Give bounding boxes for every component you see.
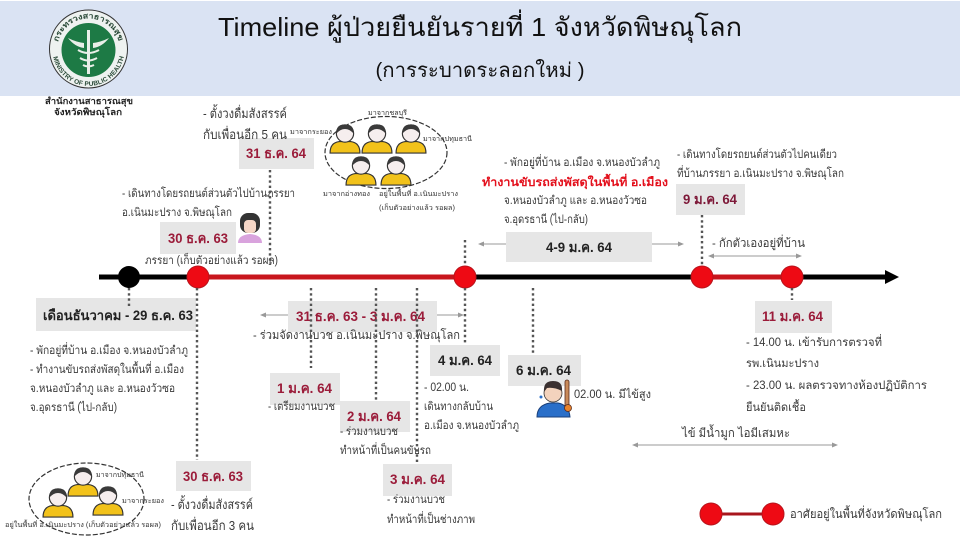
event: 31 Dec 64 drinks	[203, 104, 314, 169]
event: 6 Jan: 02.00 น. มีไข้สูง	[574, 388, 651, 401]
header band	[0, 1, 960, 96]
event: 30 Dec 63 wife: 30 ธ.ค. 63	[168, 230, 228, 246]
friends group top: มาจากระยอง	[290, 129, 332, 136]
event: December - 29 Dec 63: - ทำงานขับรถส่งพัสดุในพื้นที่ อ.เมือง	[30, 361, 184, 376]
icon: ministry of public health logo: กระทรวงสาธารณสุข	[54, 14, 123, 42]
friends group bottom: อยู่ในพื้นที่ อ.เนินมะปราง (เก็บตัวอย่างแล้ว รอผล)	[5, 518, 161, 529]
event: 3 Jan	[383, 464, 475, 526]
event: December - 29 Dec 63: - พักอยู่ที่บ้าน อ.เมือง จ.หนองบัวลำภู	[30, 342, 188, 357]
organisation name: สำนักงานสาธารณสุข	[45, 96, 133, 107]
node: 9 Jan	[691, 266, 713, 288]
event: 6 Jan	[508, 355, 651, 401]
event: 6 Jan: 6 ม.ค. 64	[516, 362, 571, 378]
event: 30 Dec 63 bottom	[171, 461, 254, 533]
legend: อาศัยอยู่ในพื้นที่จังหวัดพิษณุโลก	[790, 505, 942, 522]
event: 30 Dec 63 bottom: กับเพื่อนอีก 3 คน	[171, 517, 254, 533]
event: 2 Jan: - ร่วมงานบวช	[340, 426, 398, 438]
event: 3 Jan: 3 ม.ค. 64	[390, 471, 445, 487]
event: 31 Dec 64 drinks: 31 ธ.ค. 64	[246, 145, 306, 161]
self quarantine: - กักตัวเองอยู่ที่บ้าน	[712, 234, 805, 251]
node: 4 Jan	[454, 266, 476, 288]
friends group top: มาจากปทุมธานี	[423, 135, 472, 143]
event: 2 Jan: ทำหน้าที่เป็นคนขับรถ	[340, 442, 431, 457]
friends group bottom	[5, 463, 164, 535]
event: 9 Jan: 9 ม.ค. 64	[683, 191, 737, 207]
symptoms range	[632, 424, 838, 448]
friends group top: (เก็บตัวอย่างแล้ว รอผล)	[379, 203, 455, 212]
event: 11 Jan: ยืนยันติดเชื้อ	[746, 399, 806, 414]
icon: sick man with thermometer	[537, 380, 572, 417]
period: 31 Dec 63 - 3 Jan 64: 31 ธ.ค. 63 - 3 ม.ค. 64	[296, 308, 425, 324]
legend	[700, 503, 942, 525]
period box: 4-9 Jan: 4-9 ม.ค. 64	[546, 239, 612, 255]
friends group top	[290, 109, 472, 212]
period: 31 Dec 63 - 3 Jan 64: - ร่วมจัดงานบวช อ.เนินมะปราง จ.พิษณุโลก	[253, 328, 460, 343]
event: 4 Jan: อ.เมือง จ.หนองบัวลำภู	[424, 419, 519, 432]
event: 4 Jan: - 02.00 น.	[424, 382, 469, 394]
event: 11 Jan	[746, 301, 927, 414]
period box: 4-9 Jan	[478, 232, 684, 262]
friends group bottom: มาจากปทุมธานี	[96, 471, 144, 479]
organisation name: จังหวัดพิษณุโลก	[54, 106, 122, 118]
event: 2 Jan: 2 ม.ค. 64	[347, 408, 401, 424]
period: 31 Dec 63 - 3 Jan 64	[253, 301, 464, 343]
event: 3 Jan: - ร่วมงานบวช	[387, 494, 445, 506]
organisation name	[45, 96, 133, 118]
event: 30 Dec 63 wife	[122, 186, 295, 267]
event: 30 Dec 63 wife: ภรรยา (เก็บตัวอย่างแล้ว รอผล)	[145, 252, 278, 267]
dotted connector lines	[129, 170, 792, 463]
symptoms range: ไข้ มีน้ำมูก ไอมีเสมหะ	[681, 424, 790, 441]
event: 3 Jan: ทำหน้าที่เป็นช่างภาพ	[387, 511, 475, 526]
event: delivery driver stay	[482, 154, 668, 226]
node: start black	[118, 266, 140, 288]
event: 30 Dec 63 bottom: 30 ธ.ค. 63	[183, 468, 243, 484]
node: 30 Dec	[187, 266, 209, 288]
event: 30 Dec 63 wife: อ.เนินมะปราง จ.พิษณุโลก	[122, 205, 232, 219]
icon: wife	[238, 213, 262, 243]
event: December - 29 Dec 63: เดือนธันวาคม - 29 ธ.ค. 63	[43, 308, 193, 323]
event: 1 Jan: 1 ม.ค. 64	[277, 380, 332, 396]
event: delivery driver stay: ทำงานขับรถส่งพัสดุในพื้นที่ อ.เมือง	[482, 173, 668, 190]
event: 11 Jan: - 23.00 น. ผลตรวจทางห้องปฏิบัติการ	[746, 379, 927, 392]
event: 1 Jan	[268, 373, 340, 413]
event: 31 Dec 64 drinks: - ตั้งวงดื่มสังสรรค์	[203, 104, 287, 121]
event: 9 Jan: ที่บ้านภรรยา อ.เนินมะปราง จ.พิษณุโลก	[677, 165, 844, 180]
self quarantine	[708, 234, 805, 258]
event: 9 Jan	[676, 147, 844, 215]
event: December - 29 Dec 63	[30, 298, 196, 414]
event: 11 Jan: รพ.เนินมะปราง	[746, 357, 819, 370]
event: 31 Dec 64 drinks: กับเพื่อนอีก 5 คน	[203, 126, 287, 142]
event: 2 Jan	[340, 401, 431, 457]
icon: ministry of public health logo: MINISTRY OF PUBLIC HEALTH	[53, 56, 124, 86]
event: 11 Jan: - 14.00 น. เข้ารับการตรวจที่	[746, 334, 882, 349]
event: 4 Jan: เดินทางกลับบ้าน	[424, 400, 493, 413]
friends group top: มาจากอ่างทอง	[323, 191, 370, 198]
timeline axis	[99, 270, 899, 284]
event: 11 Jan: 11 ม.ค. 64	[762, 308, 823, 324]
event: December - 29 Dec 63: จ.อุดรธานี (ไป-กลับ)	[30, 401, 117, 414]
node: 11 Jan	[781, 266, 803, 288]
subtitle: (การระบาดระลอกใหม่ )	[376, 59, 584, 82]
event: 4 Jan	[424, 345, 519, 432]
title: Timeline ผู้ป่วยยืนยันรายที่ 1 จังหวัดพิษณุโลก	[218, 9, 742, 43]
friends group bottom: มาจากระยอง	[122, 498, 164, 505]
event: delivery driver stay: จ.หนองบัวลำภู และ อ.หนองวัวซอ	[504, 194, 647, 207]
event: 1 Jan: - เตรียมงานบวช	[268, 400, 335, 413]
event: 30 Dec 63 wife: - เดินทางโดยรถยนต์ส่วนตัวไปบ้านภรรยา	[122, 186, 295, 200]
event: delivery driver stay: - พักอยู่ที่บ้าน อ.เมือง จ.หนองบัวลำภู	[504, 154, 660, 169]
event: 4 Jan: 4 ม.ค. 64	[438, 352, 492, 368]
icon: ministry of public health logo	[49, 10, 128, 88]
event: 9 Jan: - เดินทางโดยรถยนต์ส่วนตัวไปคนเดียว	[677, 147, 837, 161]
event: December - 29 Dec 63: จ.หนองบัวลำภู และ อ.หนองวัวซอ	[30, 382, 175, 395]
event: delivery driver stay: จ.อุดรธานี (ไป-กลับ)	[504, 213, 588, 226]
event: 30 Dec 63 bottom: - ตั้งวงดื่มสังสรรค์	[171, 495, 253, 512]
friends group top: มาจากชลบุรี	[368, 109, 407, 117]
friends group top: อยู่ในพื้นที่ อ.เนินมะปราง	[379, 187, 458, 198]
